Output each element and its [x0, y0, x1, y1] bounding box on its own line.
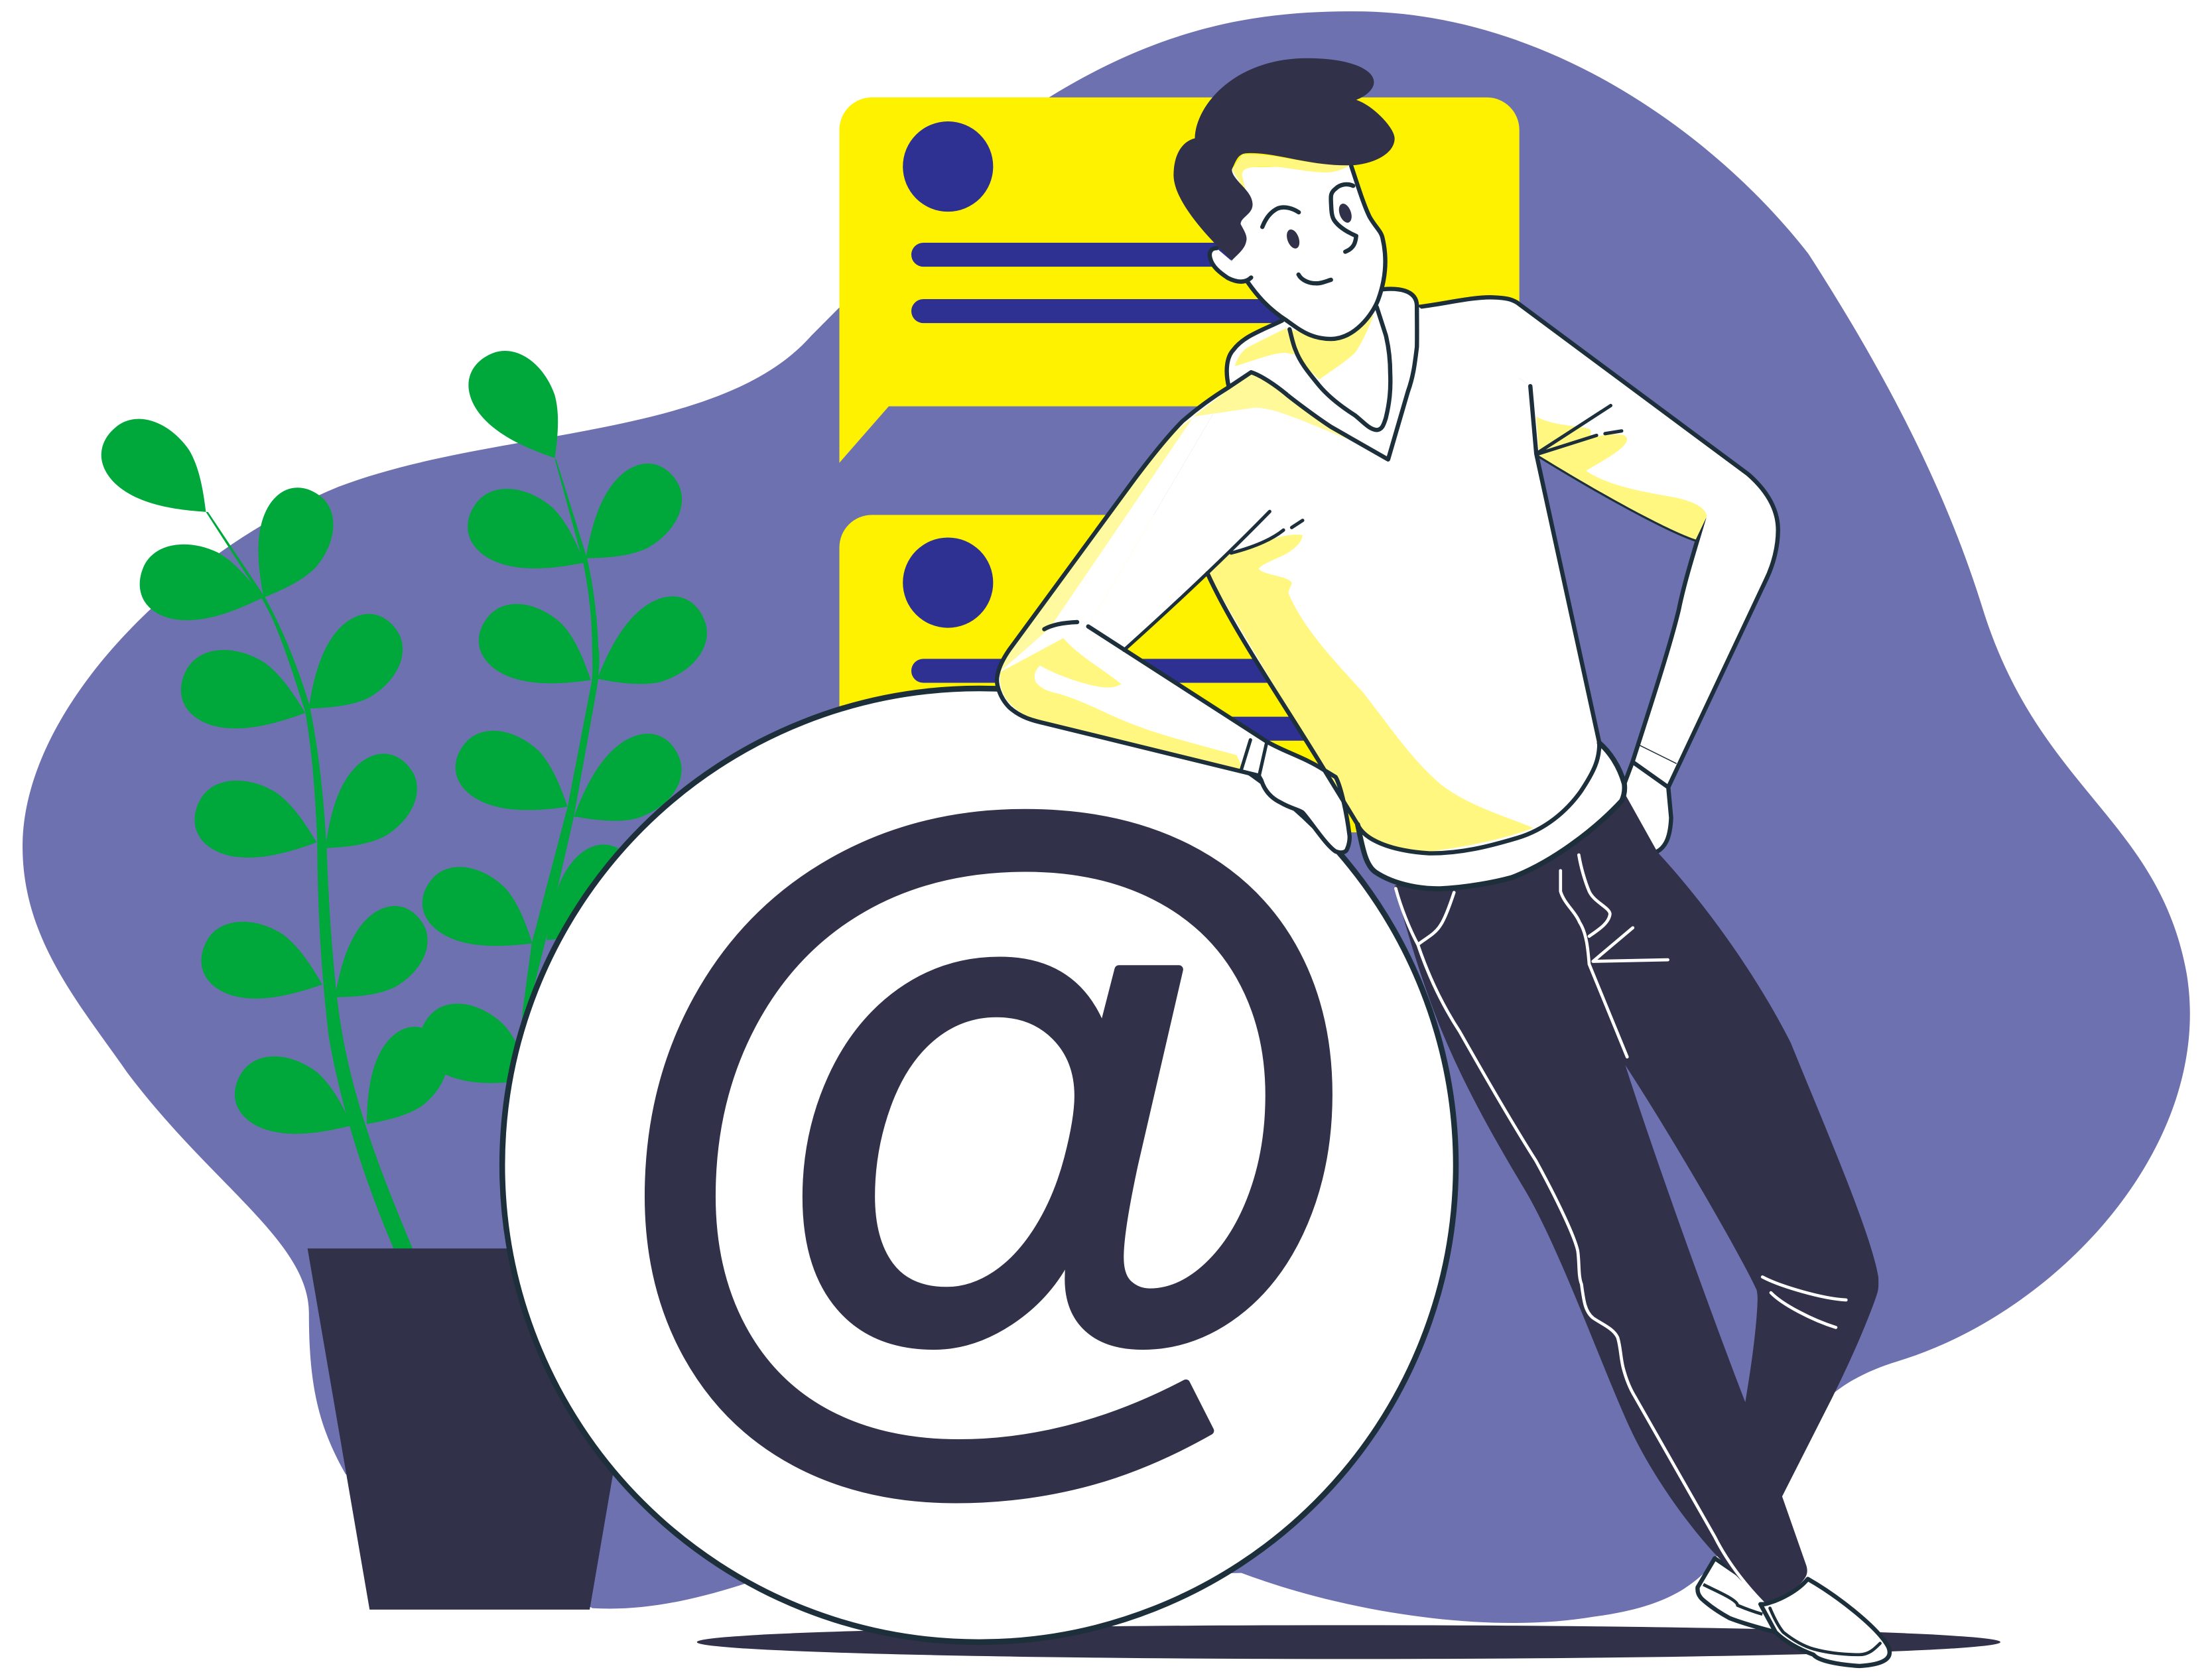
torso fill — [1088, 306, 1624, 889]
collar fill — [1228, 289, 1418, 460]
leaves — [87, 335, 722, 1162]
plant — [87, 335, 722, 1276]
panel: lower yellow chat bubble — [840, 515, 1520, 832]
forehead shade — [1232, 155, 1355, 193]
right stem — [511, 459, 600, 1276]
trouser seams — [1396, 855, 1846, 1604]
front shoe inner line — [1770, 1608, 1880, 1655]
text line one — [911, 659, 1391, 683]
sweater outline — [997, 289, 1624, 889]
text line two — [911, 717, 1391, 741]
back arm outline — [1418, 297, 1778, 852]
brows, nose and mouth — [1262, 184, 1356, 283]
shade: forearm — [1000, 638, 1244, 771]
face — [1173, 58, 1395, 339]
jaw outline — [1248, 166, 1385, 339]
plant pot — [308, 1248, 652, 1610]
shade: belly — [1207, 535, 1533, 852]
man: back arm and legs — [1395, 297, 1890, 1666]
shadow on floor — [697, 1625, 2000, 1659]
front shoe — [1760, 1579, 1890, 1666]
shade: sleeve edge — [1000, 419, 1193, 672]
man: torso and head — [997, 58, 1624, 889]
hair — [1173, 58, 1395, 261]
at symbol: @ — [604, 660, 1374, 1542]
panel: top yellow chat bubble — [840, 97, 1520, 463]
back arm — [1418, 297, 1778, 852]
shade: collar — [1235, 328, 1295, 366]
cuff line — [1639, 745, 1677, 763]
shade: armpit — [1536, 417, 1707, 540]
ear — [1210, 248, 1251, 282]
at-sign disc — [502, 660, 1456, 1642]
icon: bubble dot — [903, 121, 993, 212]
trousers — [1395, 791, 1878, 1604]
back shoe — [1697, 1558, 1789, 1632]
arm fill — [997, 387, 1350, 852]
left stem — [206, 512, 413, 1250]
text line two — [911, 299, 1334, 323]
shade: neck — [1289, 314, 1374, 379]
eyes — [1284, 202, 1354, 250]
back shoe inner line — [1703, 1584, 1762, 1614]
shade: chest — [1193, 372, 1355, 442]
text line one — [911, 243, 1307, 267]
icon: bubble dot — [903, 537, 993, 628]
